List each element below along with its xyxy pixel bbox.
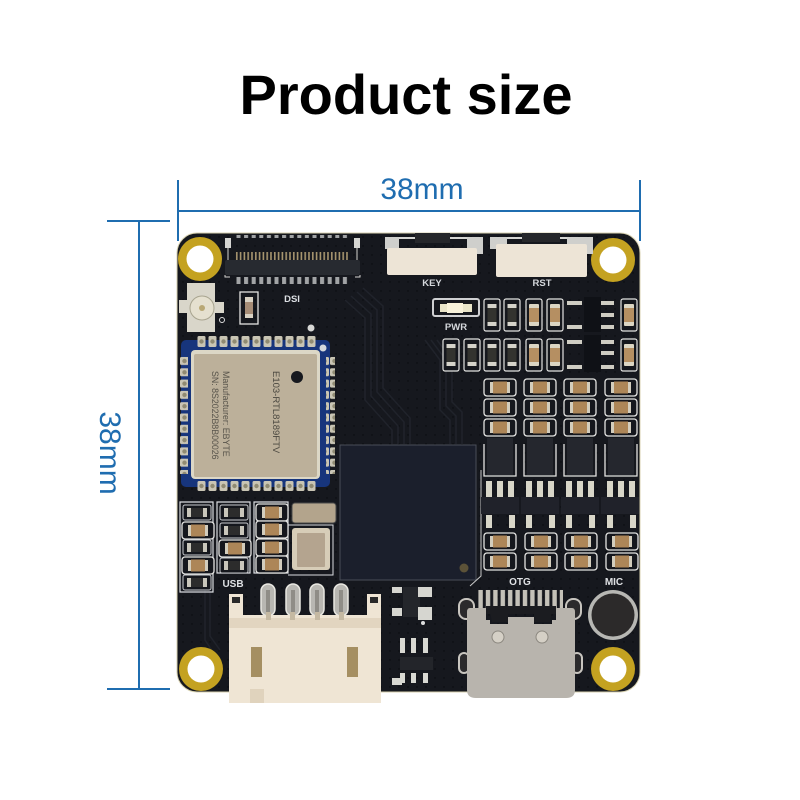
PWR LED [433,299,479,316]
RST button [490,233,593,277]
crystal oscillators [288,503,336,575]
microphone [588,590,638,640]
circuit board [177,233,640,703]
wifi module E103-RTL8189FTV: Manufacturer: EBYTE [221,371,231,457]
label: PWR: PWR [445,322,467,333]
top dimension: 38mm: 38mm [380,173,464,206]
power stage: lower capacitors [484,533,638,570]
label: OTG: OTG [509,577,531,588]
USB-C port [459,590,582,698]
passive components: upper rows [443,299,637,371]
board substrate [177,233,640,692]
power stage: MOSFETs [484,438,637,476]
main processor chip [340,445,481,586]
KEY button [385,233,483,275]
power stage: capacitor rows [484,379,637,436]
mounting hole: top left [178,237,222,281]
mounting hole: bottom right [591,647,635,691]
label: KEY: KEY [422,278,442,289]
USB JST connector [229,584,381,703]
transistors: SOT packages [567,297,614,372]
power stage: gate drivers [481,481,639,528]
top dimension: 38mm [178,173,640,241]
label: DSI: DSI [284,294,300,305]
DSI ribbon connector [225,235,360,284]
passive group beneath module [180,502,288,592]
label: USB: USB [222,579,244,590]
small fuse component [240,292,258,324]
wifi module E103-RTL8189FTV: SN: 8S2022B8B00026 [210,371,220,460]
label: MIC: MIC [605,577,623,588]
antenna connector [179,283,224,332]
wifi module E103-RTL8189FTV: E103-RTL8189FTV [270,371,281,454]
wifi module E103-RTL8189FTV [179,324,335,491]
label: RST: RST [532,278,552,289]
mounting hole: bottom left [179,647,223,691]
title: Product size [240,63,572,126]
left dimension: 38mm [93,221,170,689]
copper traces [205,288,462,655]
mounting hole: top right [591,238,635,282]
left dimension: 38mm: 38mm [93,411,126,495]
small SMD group near USB [392,587,433,685]
